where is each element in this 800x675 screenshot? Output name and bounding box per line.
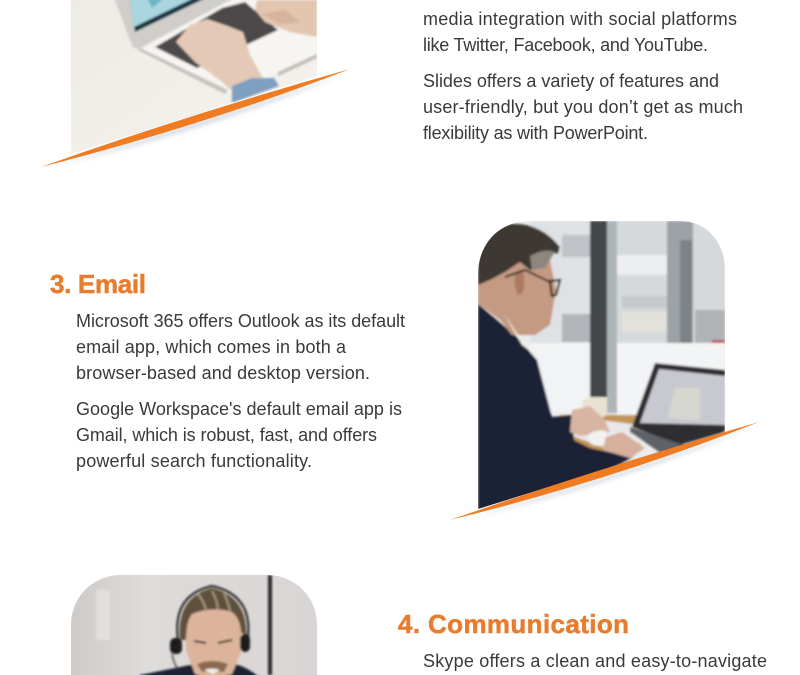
swoosh shadow [60, 76, 340, 165]
heading: 3. Email: 3. Email [50, 269, 146, 299]
text block: slides description [423, 9, 743, 143]
panel: man at window with laptop and orange swoosh [450, 221, 759, 521]
paragraph: Outlook [76, 311, 405, 383]
panel: laptop photo with orange swoosh [41, 0, 350, 167]
heading: 4. Communication: 4. Communication [398, 609, 629, 639]
photo: smiling man wearing a headset [71, 575, 317, 675]
swoosh shadow [470, 428, 750, 518]
photo: hands typing on a laptop [71, 0, 317, 165]
text block: email description [76, 311, 405, 471]
orange swoosh [41, 69, 350, 167]
paragraph: media integration: like Twitter, Facebook, and YouTube. [423, 35, 708, 55]
orange swoosh [450, 422, 759, 520]
paragraph: Outlook: email app, which comes in both a [76, 337, 347, 357]
paragraph: slides flexibility: Slides offers a variety of features and [423, 71, 719, 91]
paragraph: media integration [423, 9, 737, 55]
paragraph: slides flexibility: flexibility as with PowerPoint. [423, 123, 648, 143]
paragraph: Outlook: browser-based and desktop version. [76, 363, 370, 383]
paragraph: Gmail: Google Workspace's default email app is [76, 399, 402, 419]
text block: Skype description: Skype offers a clean and easy-to-navigate [423, 651, 767, 671]
paragraph: Outlook: Microsoft 365 offers Outlook as its default [76, 311, 405, 331]
paragraph: slides flexibility [423, 71, 743, 143]
paragraph: slides flexibility: user-friendly, but you don’t get as much [423, 97, 743, 117]
photo: man working on a laptop [478, 221, 725, 521]
paragraph: Gmail: powerful search functionality. [76, 451, 312, 471]
paragraph: Gmail: Gmail, which is robust, fast, and offers [76, 425, 377, 445]
panel: man with headset [71, 575, 317, 675]
paragraph: Gmail [76, 399, 402, 471]
paragraph: media integration: media integration with social platforms [423, 9, 737, 29]
